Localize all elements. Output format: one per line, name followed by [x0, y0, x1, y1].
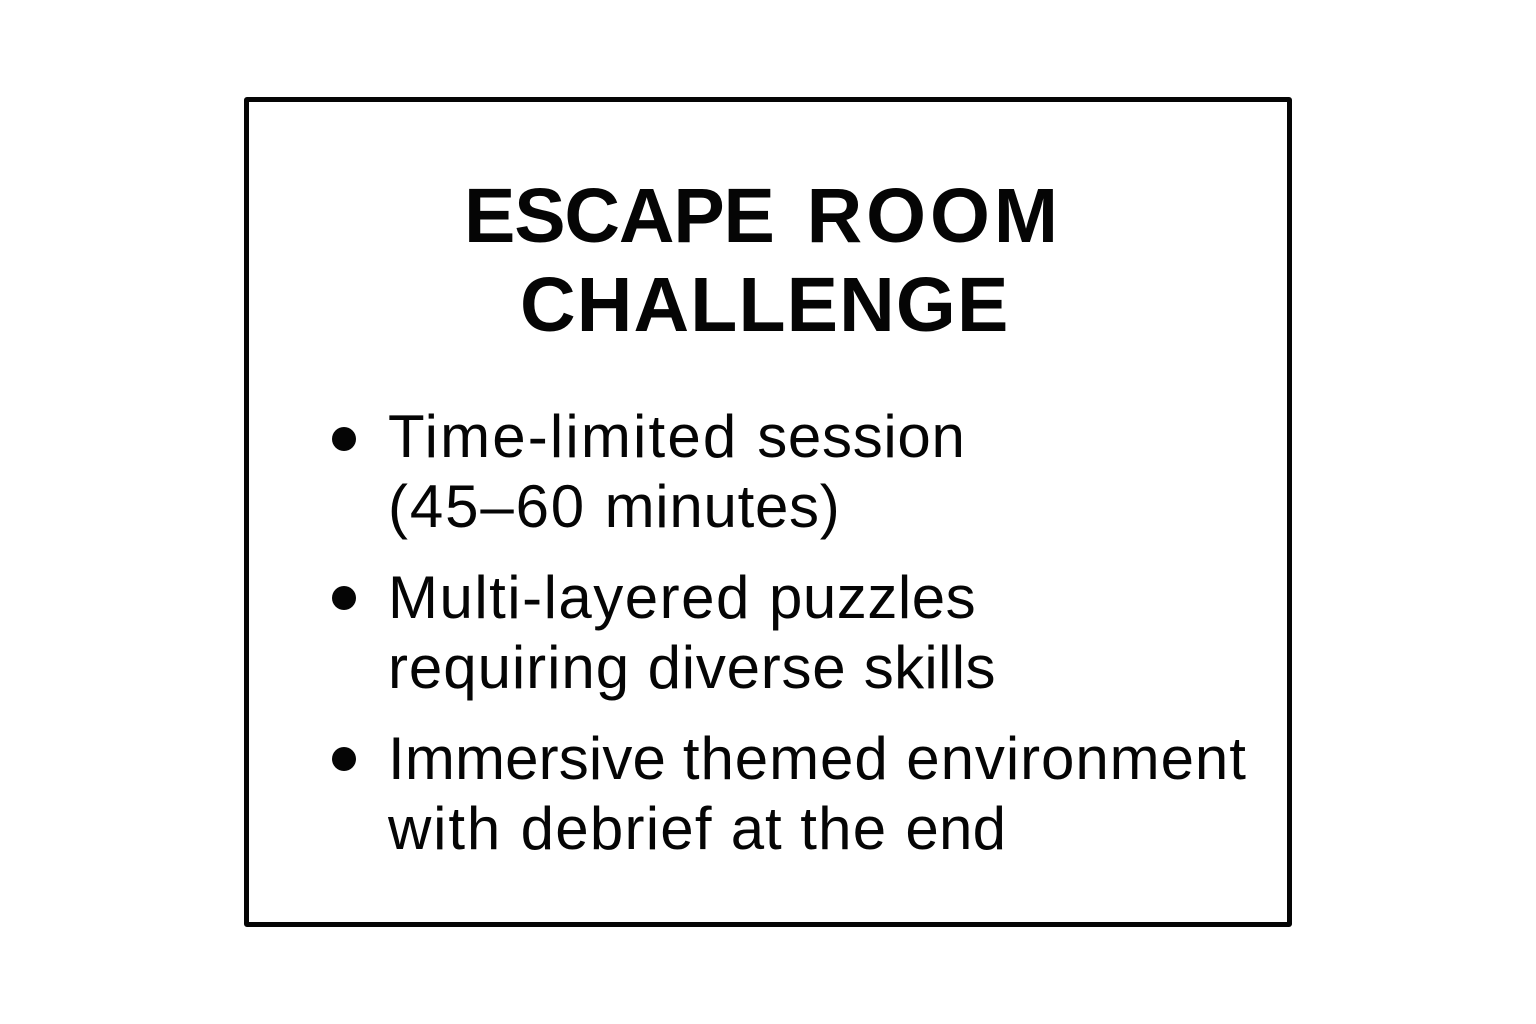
title	[464, 173, 1062, 348]
bullet 1: (45–60 minutes)	[388, 473, 841, 540]
bullet 3: Immersive themed environment	[388, 725, 1247, 792]
title: CHALLENGE	[520, 262, 1009, 348]
bullet 3: with debrief at the end	[388, 795, 1006, 862]
bullet 2	[332, 564, 996, 701]
bullet 1	[332, 403, 966, 540]
bullet 2: Multi-layered puzzles	[388, 564, 976, 631]
panel: escape room challenge	[244, 97, 1292, 927]
bullet 2: requiring diverse skills	[388, 634, 996, 701]
title: ESCAPE ROOM	[464, 173, 1062, 259]
bullet 1: Time-limited session	[388, 403, 966, 470]
bullet 3	[332, 725, 1247, 862]
